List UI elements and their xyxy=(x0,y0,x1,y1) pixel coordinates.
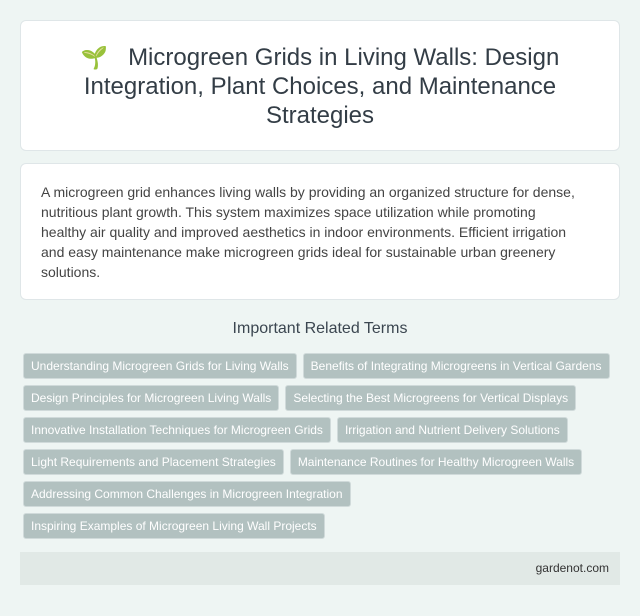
tags list: Light Requirements and Placement Strategies xyxy=(31,455,276,469)
tags list: Design Principles for Microgreen Living Walls xyxy=(31,391,271,405)
title: 🌱 Microgreen Grids in Living Walls: Design Integration, Plant Choices, and Maintenance Strategies xyxy=(81,44,559,129)
footer: gardenot.com xyxy=(536,561,609,575)
tags list: Inspiring Examples of Microgreen Living Wall Projects xyxy=(31,519,317,533)
tags list: Innovative Installation Techniques for Microgreen Grids xyxy=(31,423,323,437)
tags list: Addressing Common Challenges in Microgreen Integration xyxy=(31,487,342,501)
tags list: Selecting the Best Microgreens for Vertical Displays xyxy=(293,391,568,405)
description text: A microgreen grid enhances living walls by providing an organized structure for dense, nutritious plant growth. This system maximizes space utilization while promoting healthy air quality and improved aesthetics in indoor environments. Efficient irrigation and easy maintenance make microgreen grids ideal for sustainable urban greenery solutions. xyxy=(41,184,575,280)
footer xyxy=(20,552,620,585)
description card xyxy=(20,163,620,300)
tags list: Benefits of Integrating Microgreens in Vertical Gardens xyxy=(311,359,602,373)
section heading: Important Related Terms xyxy=(233,320,407,337)
tags list: Understanding Microgreen Grids for Living Walls xyxy=(31,359,289,373)
tags list: Irrigation and Nutrient Delivery Solutions xyxy=(345,423,560,437)
tags list xyxy=(23,353,610,539)
header card xyxy=(20,20,620,151)
tags list: Maintenance Routines for Healthy Microgreen Walls xyxy=(298,455,574,469)
